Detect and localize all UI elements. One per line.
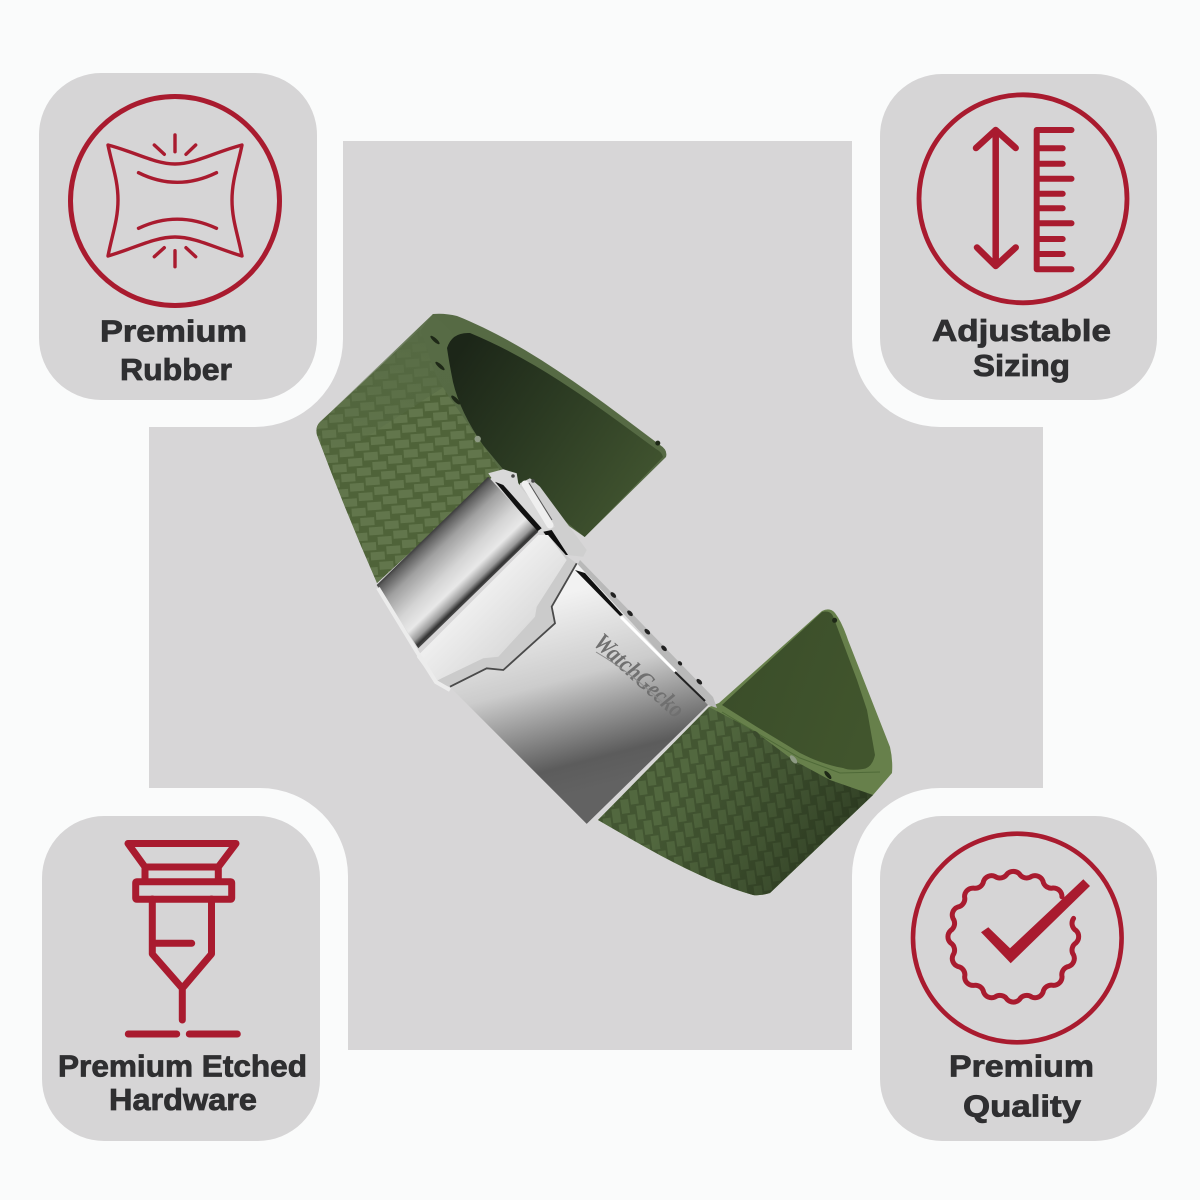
white halo: bottom left — [14, 788, 348, 1169]
label: premium quality — [949, 1048, 1094, 1124]
label: adjustable sizing: Sizing — [973, 348, 1070, 383]
label: premium rubber: Rubber — [120, 352, 232, 387]
clasp: middle folding plate — [417, 535, 576, 687]
label: adjustable sizing: Adjustable — [932, 313, 1111, 348]
label: adjustable sizing — [932, 313, 1111, 383]
label: premium etched hardware: Hardware — [109, 1082, 257, 1117]
clasp: etched logo: WatchGecko — [588, 629, 690, 724]
clasp: upper cover plate — [377, 477, 538, 648]
icon: stretching rubber pillow — [70, 96, 280, 306]
white halo: bottom right — [852, 788, 1184, 1169]
clasp: plate edge shadow and highlight — [575, 570, 705, 701]
watch strap with deployment clasp — [316, 314, 892, 895]
label: premium quality: Quality — [963, 1089, 1082, 1124]
icon: laser etcher — [128, 844, 237, 1034]
strap: upper section — [316, 314, 666, 583]
label: premium rubber: Premium — [100, 314, 247, 348]
clasp: hinge — [488, 469, 587, 557]
panel: premium quality — [880, 816, 1157, 1141]
label: premium quality: Premium — [949, 1048, 1094, 1084]
clasp: main logo plate — [450, 563, 708, 824]
white halo: top left — [11, 45, 343, 427]
panel: premium rubber — [39, 73, 317, 400]
strap: lower section — [598, 609, 892, 895]
label: premium etched hardware — [58, 1048, 307, 1117]
panel: adjustable sizing — [880, 74, 1157, 400]
label: premium etched hardware: Premium Etched — [58, 1048, 307, 1084]
clasp: side rail with holes — [575, 560, 717, 708]
white halo: top right — [852, 47, 1184, 427]
label: premium rubber — [100, 314, 247, 387]
icon: arrow and ruler — [919, 95, 1127, 303]
icon: quality seal with check — [913, 834, 1122, 1042]
clasp: left edge highlight — [378, 588, 450, 690]
central grey panel — [149, 141, 1043, 1050]
clasp: stepped edge line — [450, 563, 577, 687]
panel: premium etched hardware — [42, 816, 320, 1141]
